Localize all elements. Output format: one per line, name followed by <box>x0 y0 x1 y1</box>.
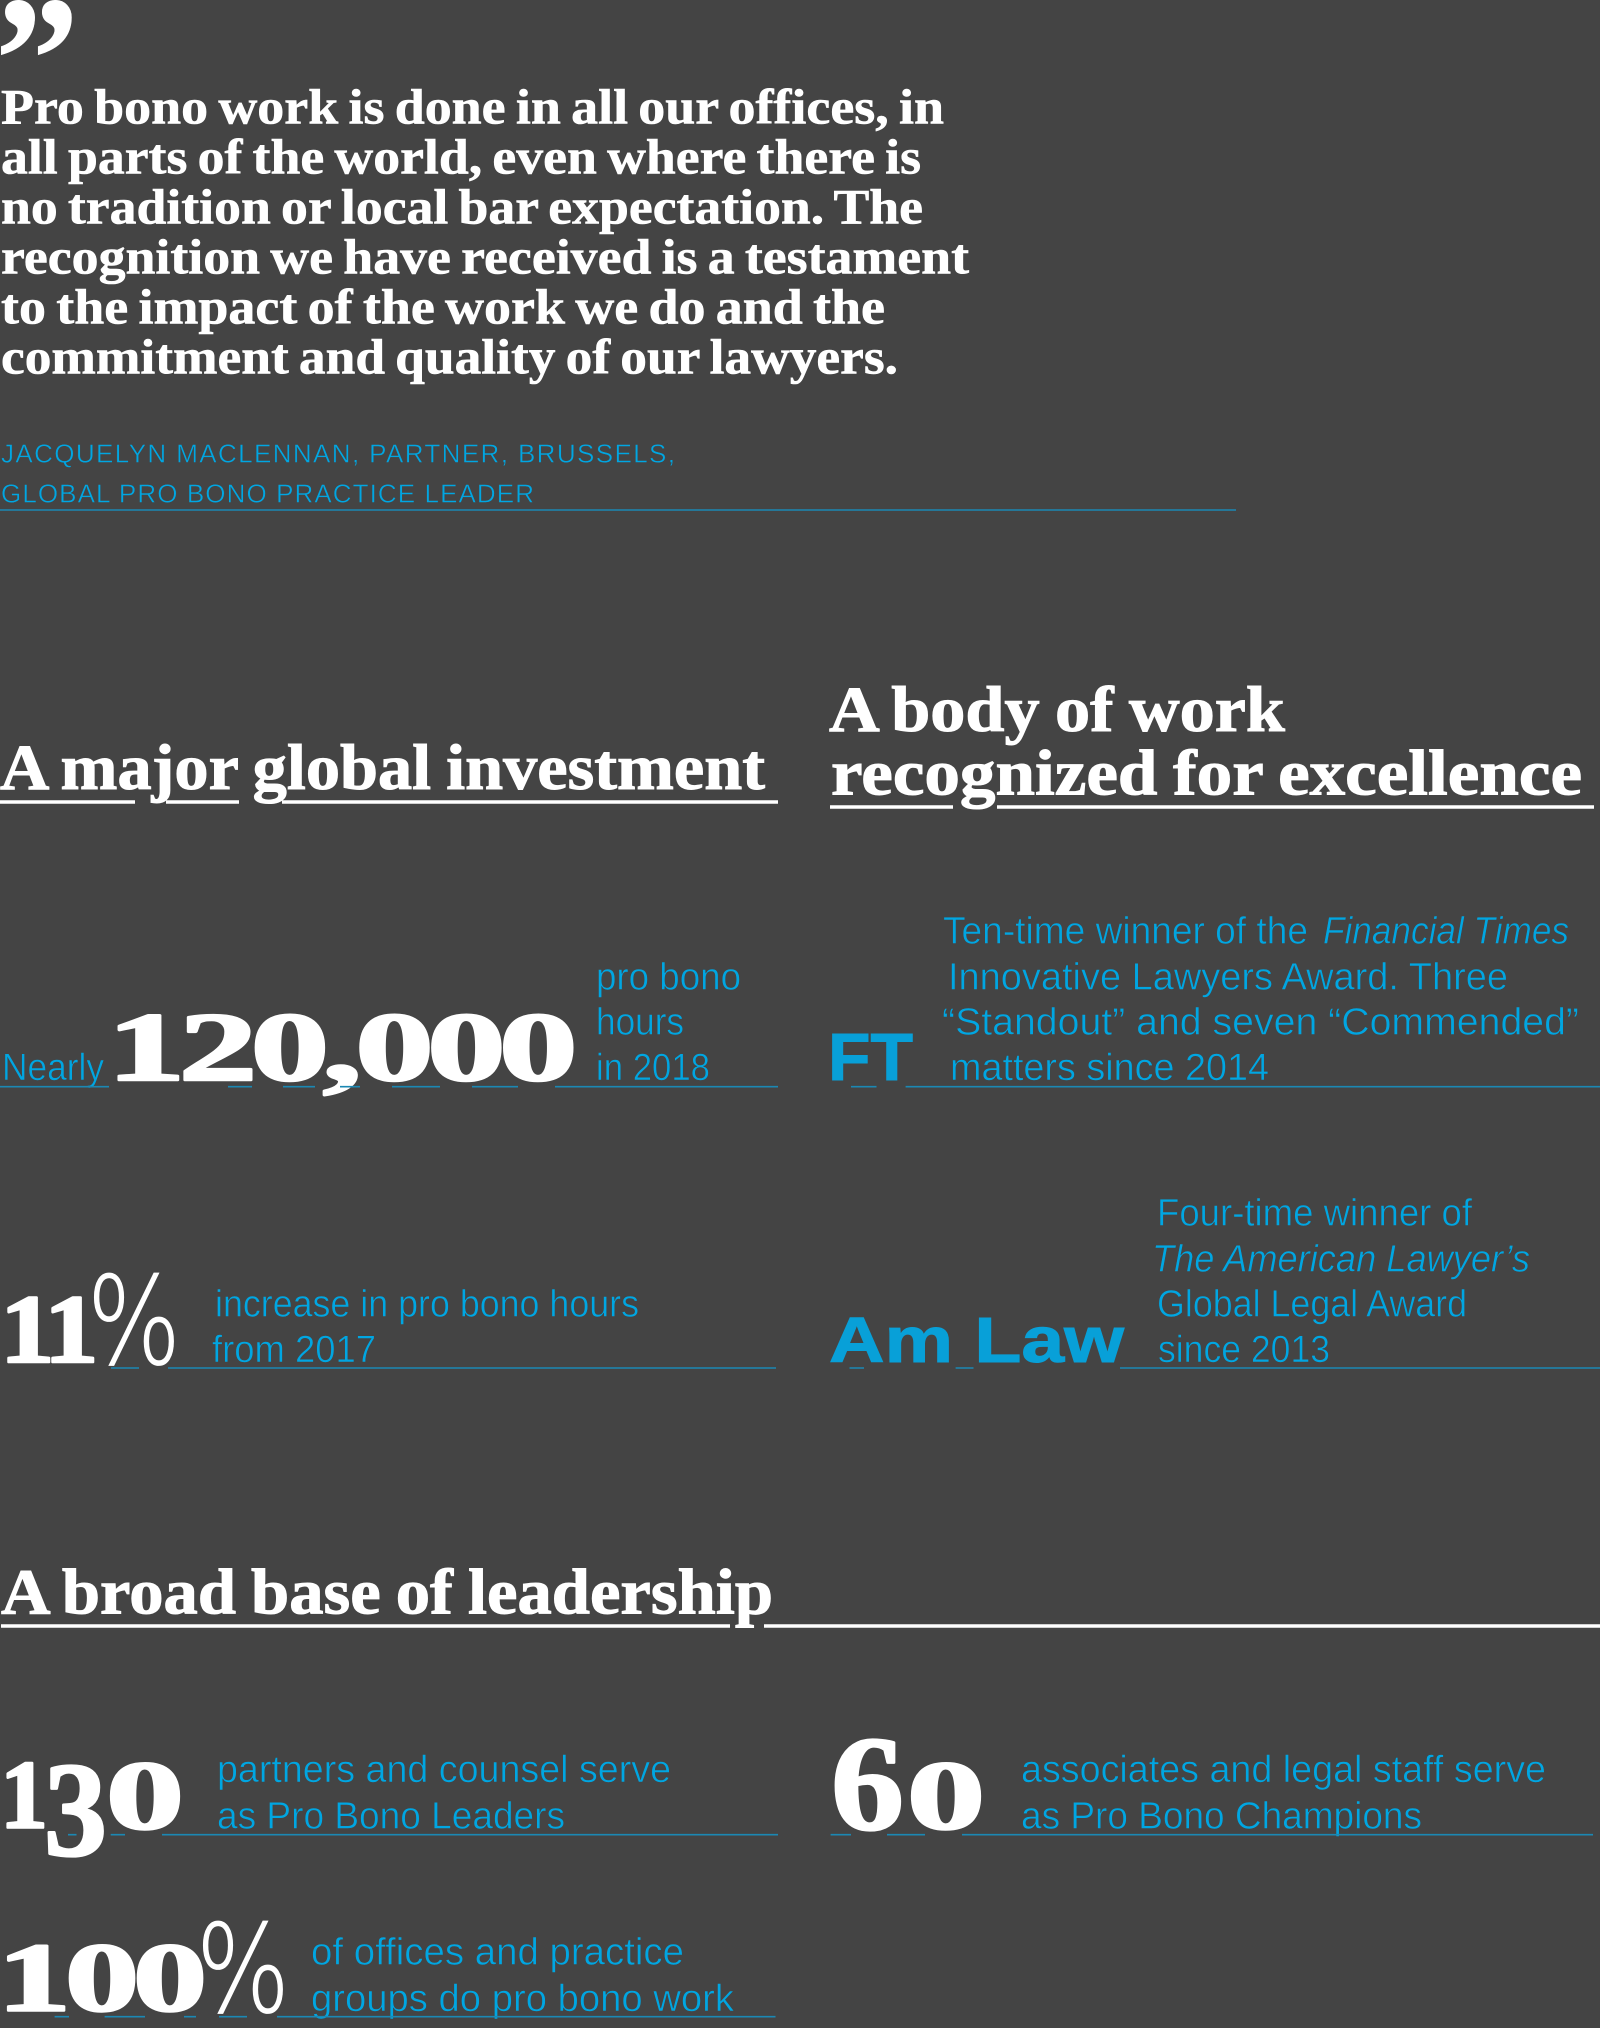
heading: a body of work recognized for excellence: A body of work <box>829 674 1286 746</box>
quote text: Pro bono work is done in all our offices, in <box>1 78 944 134</box>
award description: Financial Times: “Standout” and seven “Commended” <box>942 1002 1579 1044</box>
panel: a body of work recognized for excellence <box>828 674 1600 1376</box>
award description: Am Law: Global Legal Award <box>1157 1284 1467 1326</box>
quote text: commitment and quality of our lawyers. <box>1 328 898 384</box>
attribution: JACQUELYN MACLENNAN, PARTNER, BRUSSELS, <box>1 439 675 469</box>
stat: nearly 120,000 pro bono hours: Nearly <box>2 1047 104 1089</box>
award description: Am Law: since 2013 <box>1158 1329 1330 1371</box>
award: Financial Times <box>828 910 1600 1095</box>
quote text: all parts of the world, even where there is <box>1 128 921 184</box>
stat: 130 pro bono leaders: 1 <box>0 1742 48 1850</box>
panel: a broad base of leadership <box>0 1556 1600 2028</box>
stat: 100% of offices <box>0 1899 776 2028</box>
stat: 60 pro bono champions: 6 <box>831 1710 904 1859</box>
quote text: recognition we have received is a testament <box>1 228 969 284</box>
award description: Financial Times: Ten-time winner of the <box>943 910 1308 952</box>
quote text: no tradition or local bar expectation. The <box>1 178 923 234</box>
attribution: GLOBAL PRO BONO PRACTICE LEADER <box>1 479 534 509</box>
stat: 60 pro bono champions: associates and legal staff serve <box>1021 1749 1546 1791</box>
award description: Financial Times: matters since 2014 <box>950 1047 1269 1089</box>
stat: 11% increase: from 2017 <box>212 1329 376 1371</box>
logo: Am Law: Am Law <box>829 1304 1124 1376</box>
panel: a major global investment <box>0 732 778 1393</box>
quote text: to the impact of the work we do and the <box>1 278 885 334</box>
stat: 11% increase <box>0 1251 776 1393</box>
stat: 130 pro bono leaders: 3 <box>44 1736 107 1885</box>
attribution <box>0 439 1236 510</box>
stat: 60 pro bono champions <box>831 1710 1593 1859</box>
stat: 11% increase: increase in pro bono hours <box>215 1284 639 1326</box>
stat: 11% increase: 11 <box>0 1276 94 1384</box>
stat: nearly 120,000 pro bono hours: in 2018 <box>596 1047 710 1089</box>
award description: Financial Times <box>942 910 1579 1089</box>
stat: 130 pro bono leaders: 0 <box>106 1742 184 1850</box>
award description: Am Law: The American Lawyer’s <box>1152 1238 1530 1280</box>
heading: a body of work recognized for excellence <box>829 674 1594 809</box>
award description: Financial Times: Innovative Lawyers Award. Three <box>948 956 1508 998</box>
stat: 100% of offices: of offices and practice <box>311 1932 684 1974</box>
stat: 11% increase: % <box>87 1251 181 1393</box>
panel: pull quote <box>0 0 1236 510</box>
stat: 130 pro bono leaders: partners and counsel serve <box>217 1749 671 1791</box>
award: Am Law <box>829 1192 1600 1376</box>
stat: 60 pro bono champions: 0 <box>907 1742 985 1850</box>
quote text <box>1 78 969 384</box>
stat: 60 pro bono champions: as Pro Bono Champions <box>1021 1796 1422 1838</box>
heading: a body of work recognized for excellence: recognized for excellence <box>831 737 1582 809</box>
stat: 130 pro bono leaders: as Pro Bono Leaders <box>217 1796 565 1838</box>
heading: a broad base of leadership: A broad base of leadership <box>1 1556 773 1628</box>
stat: nearly 120,000 pro bono hours: 120,000 <box>107 994 573 1102</box>
award description: Financial Times: Financial Times <box>1323 910 1569 952</box>
stat: nearly 120,000 pro bono hours <box>0 956 778 1102</box>
logo: FT: FT <box>828 1020 913 1095</box>
heading: a major global investment: A major global investment <box>0 732 765 804</box>
award description: Am Law: Four-time winner of <box>1157 1192 1472 1234</box>
stat: 100% of offices: groups do pro bono work <box>311 1978 735 2020</box>
stat: 130 pro bono leaders <box>0 1736 778 1885</box>
award description: Am Law <box>1152 1192 1530 1371</box>
stat: nearly 120,000 pro bono hours: hours <box>596 1002 684 1044</box>
stat: nearly 120,000 pro bono hours: pro bono <box>596 956 741 998</box>
